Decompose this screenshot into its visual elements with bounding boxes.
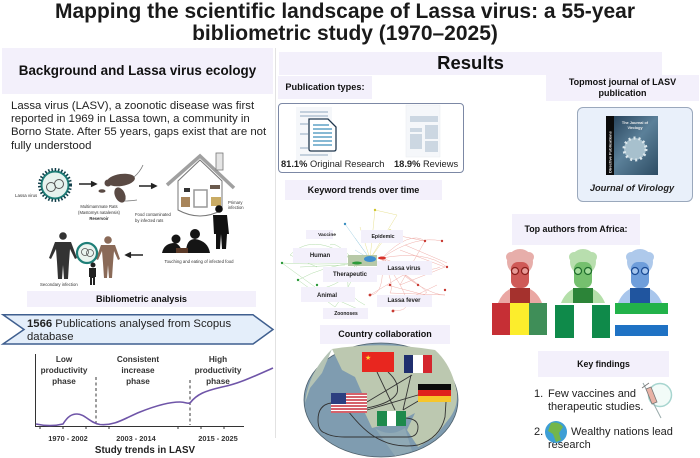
flag: Guinea bbox=[492, 303, 547, 335]
panel: publication types: 81.1% Original Research bbox=[281, 159, 384, 169]
heading: bibliometric analysis: Bibliometric analysis bbox=[96, 294, 187, 304]
journal cover: Directive Publications bbox=[608, 130, 612, 173]
heading: bibliometric analysis bbox=[27, 291, 256, 307]
panel: journal: Journal of Virology bbox=[590, 183, 674, 193]
heading: key findings bbox=[538, 351, 669, 377]
heading: results bbox=[279, 52, 662, 75]
chart: keyword network bbox=[280, 208, 448, 319]
phase labels: phase bbox=[206, 377, 230, 386]
label: reservoir: Reservoir bbox=[89, 216, 109, 221]
title: Mapping the scientific landscape of Lassa virus: a 55-year bbox=[55, 0, 635, 23]
heading: publication types bbox=[278, 76, 372, 99]
finding 2: 2. bbox=[534, 426, 543, 438]
text block: findings: Few vaccines and bbox=[548, 388, 636, 400]
text block: findings: therapeutic studies. bbox=[548, 401, 643, 413]
heading: publication types: Publication types: bbox=[285, 82, 365, 92]
globe bbox=[304, 343, 458, 457]
author: Sierra Leone bbox=[618, 249, 662, 303]
icon: virus bbox=[40, 170, 70, 200]
heading: background bbox=[2, 48, 273, 94]
phase labels: Consistent bbox=[117, 355, 159, 364]
author: Nigeria bbox=[561, 249, 605, 303]
keyword labels: Epidemic bbox=[371, 234, 395, 240]
heading: country collaboration bbox=[320, 325, 450, 344]
axis labels bbox=[48, 434, 238, 443]
person: brown bbox=[96, 236, 120, 278]
label: food contaminated: Food contaminated bbox=[135, 212, 172, 217]
label: secondary infection: Secondary infection bbox=[40, 282, 78, 287]
flag: nigeria bbox=[377, 411, 406, 426]
text block: intro bbox=[11, 100, 266, 152]
text block: intro: fully understood bbox=[11, 140, 91, 152]
person: dark bbox=[49, 232, 77, 279]
text block: intro: reported in 1969 in Lassa town, a community in bbox=[11, 113, 250, 125]
keyword labels: Vaccine bbox=[318, 232, 336, 238]
person: child bbox=[89, 262, 96, 285]
phase labels: productivity bbox=[41, 366, 88, 375]
trend line bbox=[36, 368, 273, 426]
person silhouette: standing bbox=[213, 205, 229, 249]
flag: Nigeria bbox=[555, 305, 610, 338]
keyword labels bbox=[293, 230, 432, 319]
icon: rats bbox=[98, 165, 143, 204]
authors figures bbox=[492, 249, 668, 338]
axis labels: 1970 - 2002 bbox=[48, 434, 88, 443]
network nodes bbox=[281, 209, 448, 312]
label: Lassa virus: Lassa virus bbox=[15, 193, 38, 198]
journal cover bbox=[606, 116, 658, 175]
text block: findings: Wealthy nations lead bbox=[571, 426, 673, 438]
banner: publications analysed: database bbox=[27, 331, 73, 343]
keyword labels: Lassa fever bbox=[387, 298, 421, 304]
phase labels: increase bbox=[121, 366, 155, 375]
journal cover: Virology bbox=[627, 126, 643, 130]
heading: keyword trends: Keyword trends over time bbox=[308, 185, 419, 195]
phase labels: productivity bbox=[195, 366, 242, 375]
title: bibliometric study (1970–2025) bbox=[192, 22, 498, 44]
phase labels: phase bbox=[126, 377, 150, 386]
map: country collaboration bbox=[304, 342, 458, 458]
phase labels: High bbox=[209, 355, 227, 364]
flag: china bbox=[362, 352, 394, 372]
flag: germany bbox=[418, 384, 451, 402]
axis labels: 2015 - 2025 bbox=[198, 434, 238, 443]
flag: Sierra Leone bbox=[615, 303, 668, 336]
label: primary infection: infection bbox=[228, 205, 244, 210]
phase labels bbox=[41, 355, 242, 386]
text block: intro: Lassa virus (LASV), a zoonotic disease was first bbox=[11, 100, 254, 112]
banner: publications analysed: 1566 Publications analysed from Scopus bbox=[27, 318, 231, 330]
panel: publication types bbox=[278, 103, 464, 173]
panel: publication types: 18.9% Reviews bbox=[394, 159, 458, 169]
arrow: rats to house bbox=[139, 184, 156, 188]
axis labels: 2003 - 2014 bbox=[116, 434, 157, 443]
heading: topmost journal bbox=[546, 75, 699, 101]
people eating bbox=[162, 229, 210, 253]
heading: key findings: Key findings bbox=[577, 359, 630, 369]
heading: keyword trends bbox=[285, 180, 442, 200]
icon: virus small bbox=[77, 243, 97, 263]
label: reservoir: Multimammate Rats bbox=[80, 204, 118, 209]
chart title: Study trends in LASV bbox=[95, 445, 196, 456]
keyword labels: Therapeutic bbox=[333, 272, 368, 278]
heading: top authors: Top authors from Africa: bbox=[524, 224, 628, 234]
heading: country collaboration: Country collaboration bbox=[338, 329, 432, 339]
icon: house bbox=[167, 153, 234, 216]
flag: france bbox=[404, 355, 432, 373]
panel: journal bbox=[577, 107, 693, 202]
text block: findings: research bbox=[548, 439, 591, 451]
label: food contaminated: by infected rats bbox=[135, 218, 163, 223]
network links bbox=[282, 210, 447, 310]
flag: china: ★ bbox=[365, 354, 371, 362]
phase labels: phase bbox=[52, 377, 76, 386]
keyword labels: Zoonoses bbox=[334, 311, 358, 317]
heading: top authors bbox=[512, 214, 640, 245]
title bbox=[55, 0, 635, 44]
journal cover: The Journal of bbox=[622, 121, 649, 125]
chart: study trends bbox=[35, 354, 274, 456]
ecology diagram bbox=[15, 152, 244, 287]
axes bbox=[36, 354, 244, 426]
heading: topmost journal: Topmost journal of LASV bbox=[569, 77, 676, 87]
heading: topmost journal: publication bbox=[598, 88, 646, 98]
arrow: to secondary infection bbox=[126, 252, 143, 258]
text block: findings bbox=[534, 388, 673, 451]
banner: publications analysed bbox=[0, 314, 274, 345]
heading: background: Background and Lassa virus ecology bbox=[19, 63, 256, 78]
phase labels: Low bbox=[56, 355, 73, 364]
keyword labels: Lassa virus bbox=[387, 266, 421, 272]
author: Guinea bbox=[498, 249, 542, 303]
heading: results: Results bbox=[437, 52, 504, 73]
text block: intro: Borno State. After 55 years, gaps exist that are not bbox=[11, 126, 266, 138]
phase dividers bbox=[96, 377, 190, 425]
label: touching and eating: Touching and eating of infected food bbox=[164, 259, 234, 264]
panel divider bbox=[274, 48, 276, 438]
label: primary infection: Primary bbox=[228, 200, 243, 205]
finding 1: 1. bbox=[534, 388, 543, 400]
icon: original research document bbox=[296, 104, 440, 160]
keyword labels: Human bbox=[310, 253, 330, 259]
icon: syringe bbox=[642, 382, 672, 418]
icon: globe bbox=[545, 421, 567, 443]
flag: usa bbox=[331, 393, 367, 413]
collaboration lines bbox=[318, 372, 446, 446]
arrow: virus to rats bbox=[79, 182, 96, 186]
label: reservoir: (Mastomys natalensis) bbox=[78, 210, 121, 215]
keyword labels: Animal bbox=[317, 293, 337, 299]
land masses bbox=[332, 345, 457, 447]
